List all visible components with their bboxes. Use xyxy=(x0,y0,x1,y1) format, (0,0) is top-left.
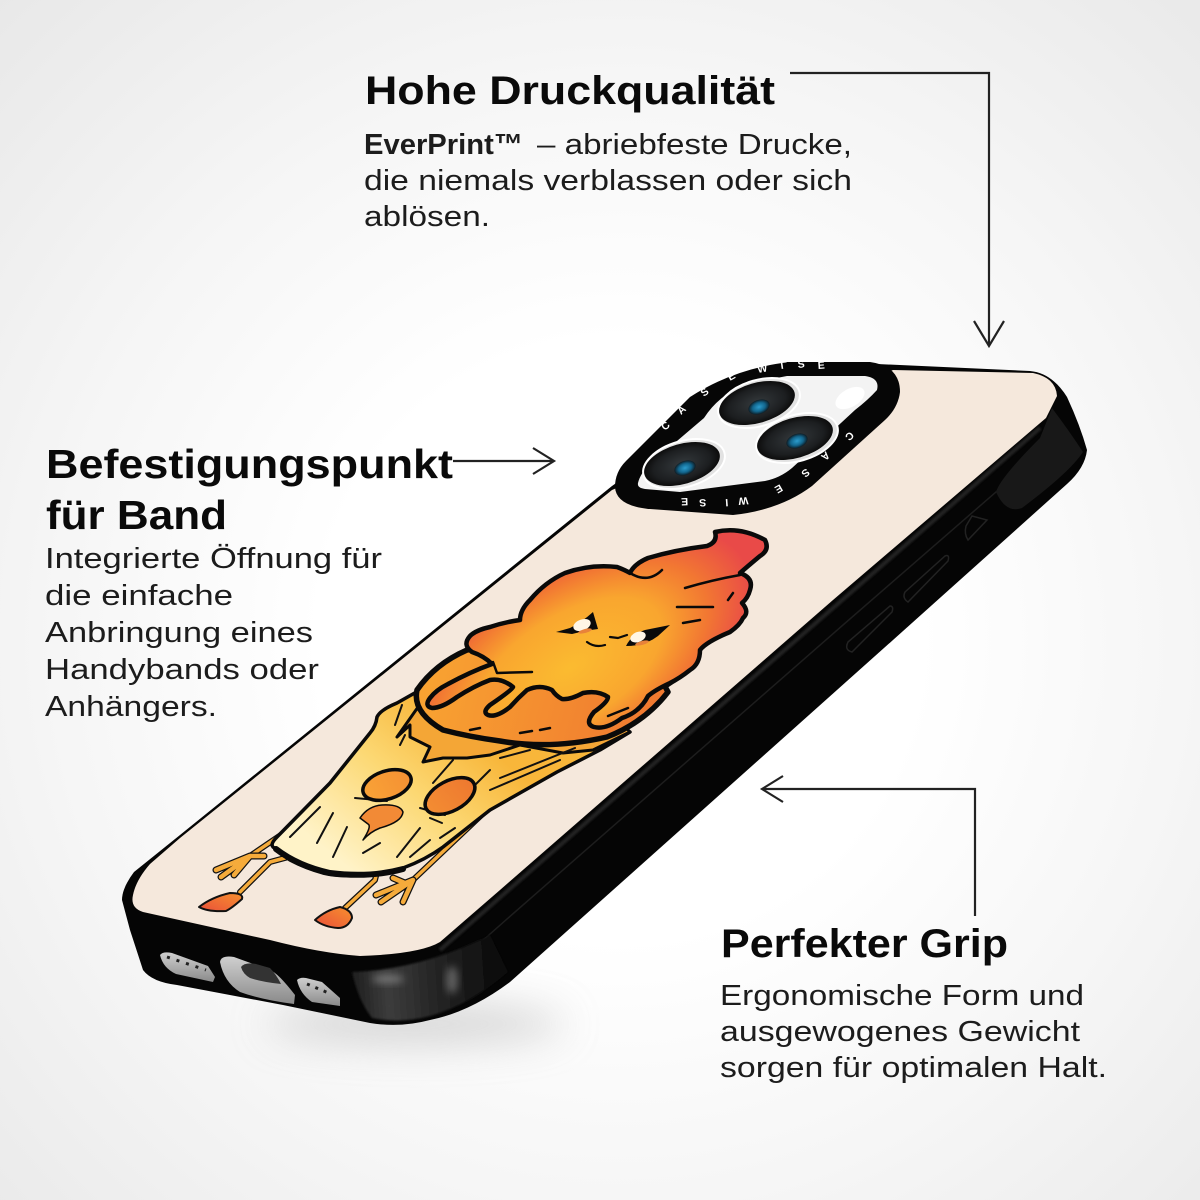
body: print quality: – abriebfeste Drucke, xyxy=(537,129,852,161)
mouth xyxy=(587,635,627,646)
body: print quality: die niemals verblassen oder sich xyxy=(364,165,852,197)
pepperoni spots xyxy=(359,764,481,840)
lower scoop xyxy=(416,640,668,745)
melting top flame xyxy=(427,530,767,728)
foot right xyxy=(315,907,352,928)
body: strap attachment: Integrierte Öffnung für xyxy=(45,543,382,575)
heading: grip: Perfekter Grip xyxy=(721,922,1008,966)
ruffle band under scoop xyxy=(397,690,630,762)
foot left xyxy=(199,893,242,911)
casewise lettering bottom: CASEWISE xyxy=(681,429,856,508)
black case body xyxy=(122,362,1087,1025)
lens 3 xyxy=(637,430,731,498)
top right bumper xyxy=(996,408,1083,509)
wrapper skirt xyxy=(272,690,630,876)
arrow: strap attachment xyxy=(453,448,554,474)
left eye xyxy=(556,612,598,635)
heading: strap attachment xyxy=(46,441,453,538)
body: print quality: EverPrint™ xyxy=(364,129,523,161)
body: strap attachment xyxy=(45,543,382,723)
illustration: ice cream muffin character xyxy=(199,530,767,928)
body: grip: ausgewogenes Gewicht xyxy=(720,1016,1080,1048)
body: grip: sorgen für optimalen Halt. xyxy=(720,1052,1107,1084)
right eye xyxy=(626,625,670,647)
camera glass xyxy=(638,376,878,492)
text block: print quality xyxy=(364,69,852,233)
cream back panel xyxy=(132,370,1057,956)
body: print quality xyxy=(364,129,852,233)
bottom port left xyxy=(160,952,215,982)
heading: print quality: Hohe Druckqualität xyxy=(365,69,775,113)
heading: strap attachment: für Band xyxy=(46,492,227,538)
wrapper pleats xyxy=(290,705,575,857)
limbs xyxy=(216,777,490,908)
bottom corner highlight xyxy=(352,935,508,1021)
lens 1 xyxy=(712,369,806,437)
casewise lettering top: CASEWISE xyxy=(659,358,825,433)
drip highlight lines xyxy=(443,570,740,733)
body: print quality: ablösen. xyxy=(364,201,490,233)
lens 2 xyxy=(750,404,844,472)
body: grip: Ergonomische Form und xyxy=(720,980,1084,1012)
face xyxy=(556,612,670,647)
camera frame xyxy=(615,362,900,515)
side rail groove xyxy=(455,445,1050,965)
side rim sheen xyxy=(440,428,1040,950)
camera highlight xyxy=(832,382,868,414)
body: strap attachment: Anbringung eines xyxy=(45,617,313,649)
text block: strap attachment xyxy=(45,441,453,723)
phone shadow xyxy=(265,1004,565,1044)
wrapper bottom arc xyxy=(276,849,403,875)
body: strap attachment: Handybands oder xyxy=(45,654,319,686)
text block: grip xyxy=(720,922,1107,1084)
body: strap attachment: Anhängers. xyxy=(45,691,217,723)
arrow: print quality xyxy=(790,73,1004,346)
volume and power buttons xyxy=(847,516,987,652)
bottom port right xyxy=(297,978,340,1006)
body: grip xyxy=(720,980,1107,1084)
arrow: grip xyxy=(762,776,975,916)
body: strap attachment: die einfache xyxy=(45,580,233,612)
camera island xyxy=(615,358,900,515)
heading: strap attachment: Befestigungspunkt xyxy=(46,441,453,487)
bottom charging port xyxy=(220,957,295,1004)
phone case xyxy=(122,362,1087,1025)
